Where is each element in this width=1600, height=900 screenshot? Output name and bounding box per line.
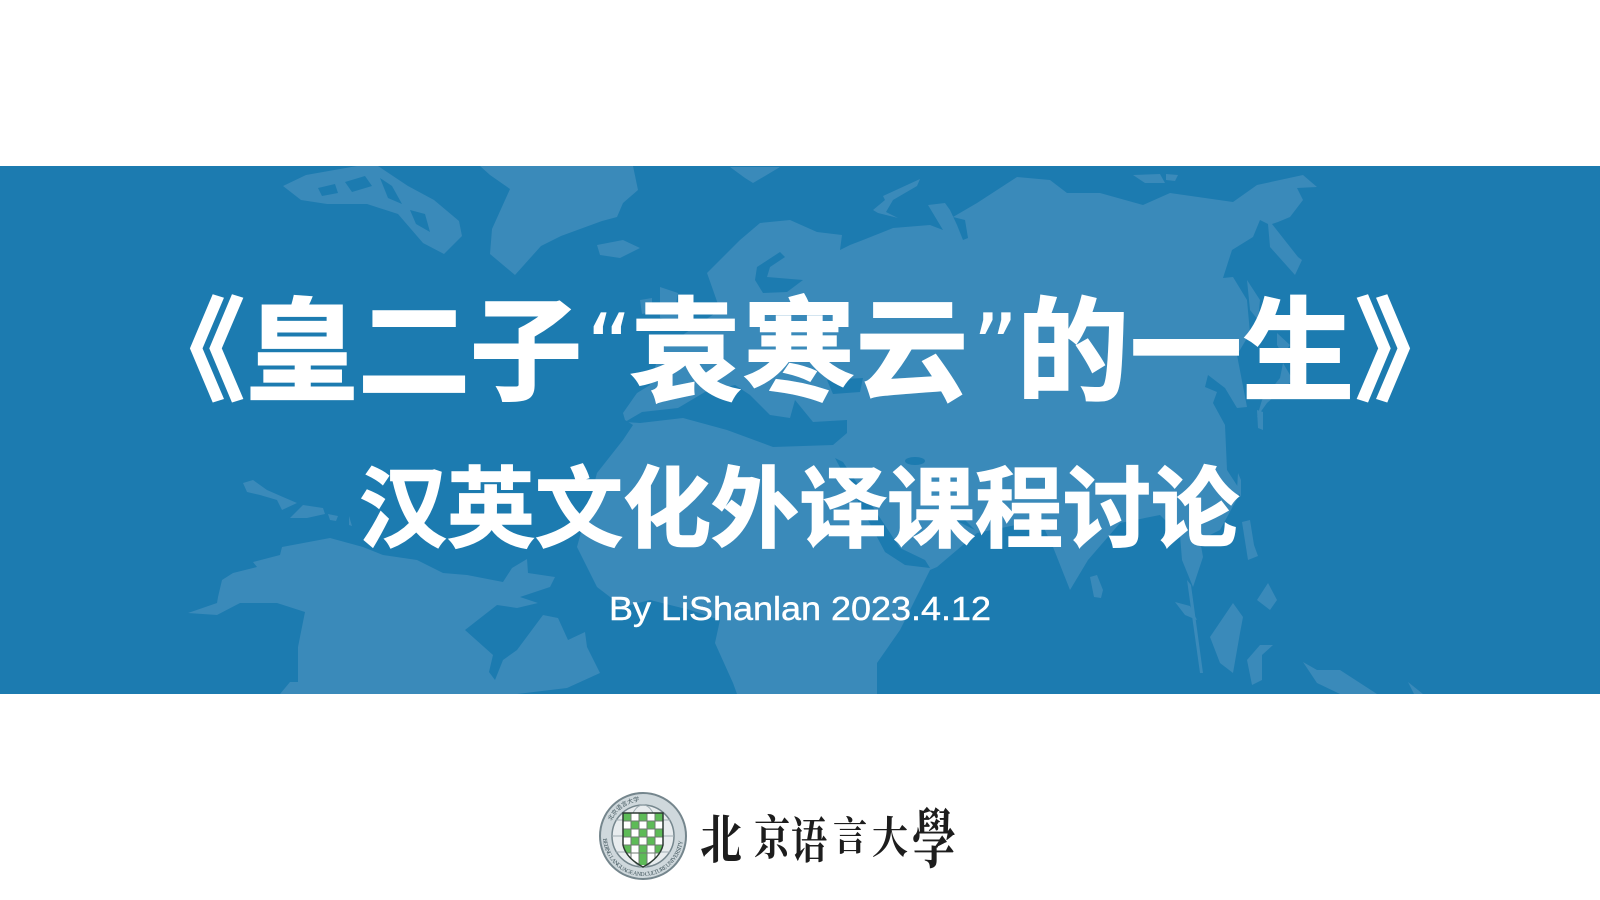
icon: checkered shield <box>623 813 663 867</box>
title <box>133 290 1467 415</box>
land: Greenland <box>480 166 638 275</box>
land: Japan, Sakhalin and Ryukyu <box>1247 280 1293 430</box>
title: 《皇二子 <box>133 290 582 415</box>
land: Americas-like southern mass <box>188 538 600 694</box>
university name in calligraphy: 大 <box>872 814 908 863</box>
world map background <box>188 166 1423 694</box>
subtitle: 汉英文化外译课程讨论 <box>359 460 1239 559</box>
sea overlays <box>318 176 975 568</box>
icon: university seal: 北京语言大学 <box>608 796 639 820</box>
logo: Beijing Language and Culture University <box>599 792 956 880</box>
land: Sri Lanka and Southeast Asia islands <box>1090 473 1423 694</box>
land: Arctic islands <box>283 166 462 254</box>
university name in calligraphy: 语 <box>791 815 827 869</box>
university name in calligraphy: 京 <box>754 813 791 866</box>
university name in calligraphy: 學 <box>911 806 956 877</box>
icon: university seal: BEIJING LANGUAGE AND CULTURE UNIVERSITY <box>603 838 682 876</box>
title: ” <box>972 295 1019 400</box>
land: Caribbean islands <box>243 480 352 526</box>
panel: blue banner with world map <box>0 166 1600 694</box>
title: 袁寒云 <box>630 290 968 415</box>
land: Eurasia and Africa <box>577 175 1317 694</box>
icon: university seal <box>599 792 687 880</box>
university name in calligraphy: 北 <box>700 813 742 870</box>
university name in calligraphy <box>700 806 956 877</box>
land: northern islands <box>597 167 1178 322</box>
title: 的一生》 <box>1017 290 1467 415</box>
title: “ <box>586 295 633 400</box>
university name in calligraphy: 言 <box>833 816 867 860</box>
byline: By LiShanlan 2023.4.12 <box>609 590 991 627</box>
